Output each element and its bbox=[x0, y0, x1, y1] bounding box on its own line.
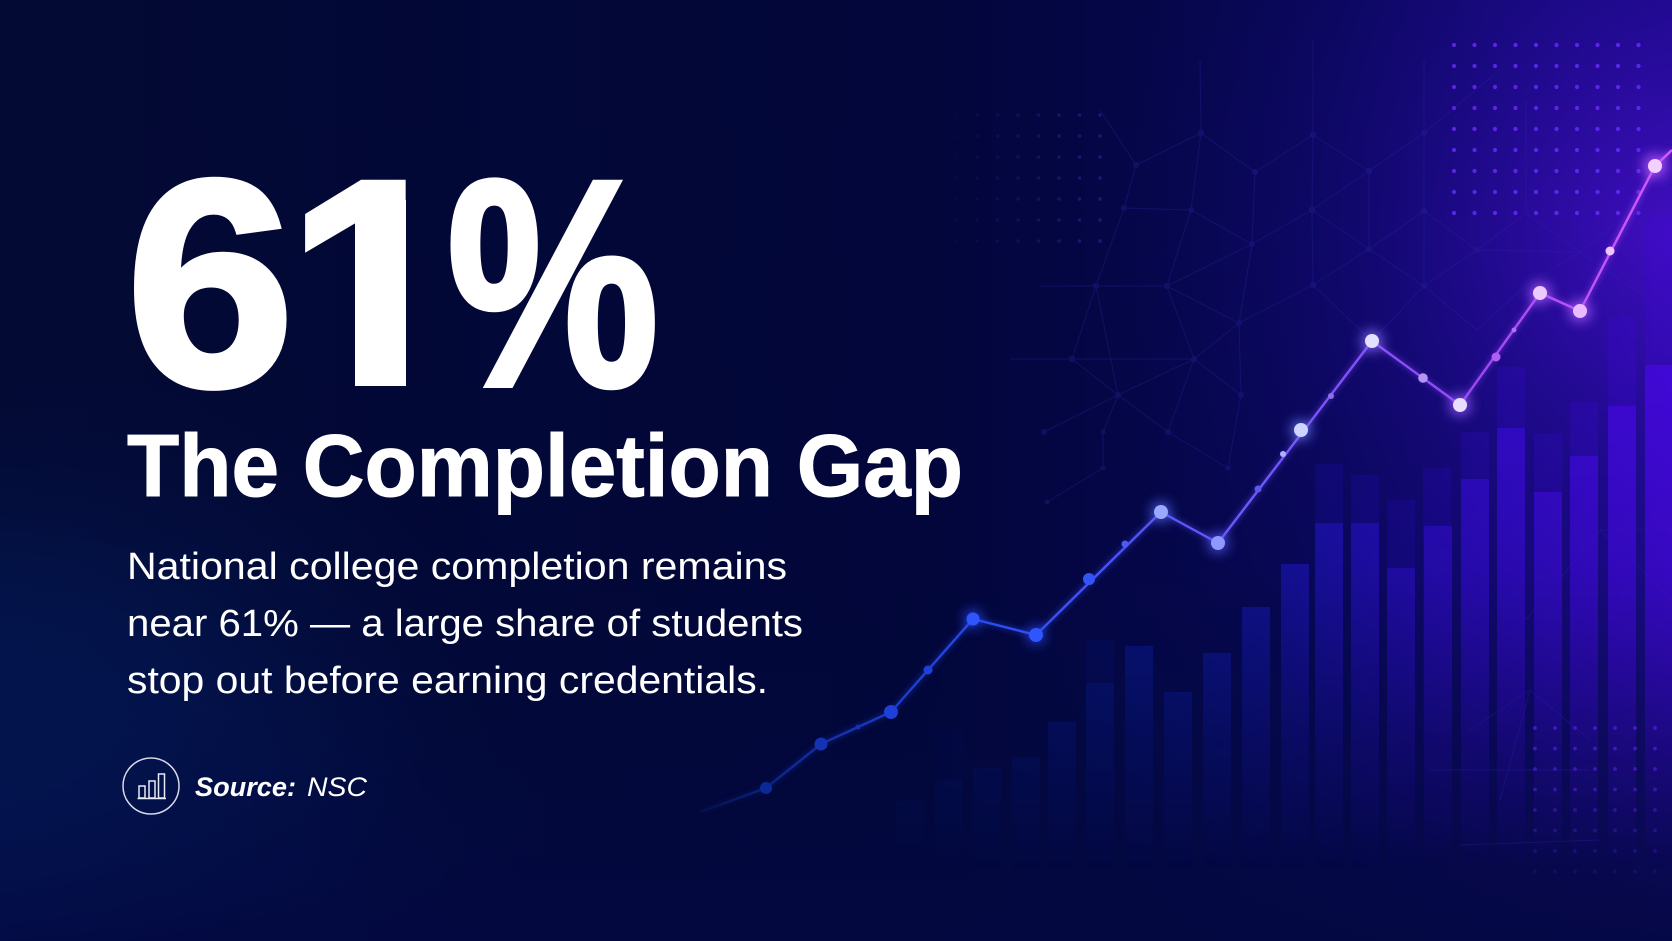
line chart bbox=[700, 150, 1672, 812]
dot grid: upper middle bbox=[957, 113, 1102, 243]
source row bbox=[123, 758, 368, 814]
dot grid: lower right bbox=[1533, 726, 1657, 874]
icon: bar chart in circle bbox=[123, 758, 179, 814]
big stat: 61%: % bbox=[447, 119, 659, 448]
line glow bbox=[700, 150, 1672, 812]
description: stop out before earning credentials. bbox=[127, 660, 768, 702]
source text bbox=[195, 772, 368, 802]
trend line bbox=[700, 150, 1672, 812]
network mesh bbox=[1010, 40, 1672, 845]
back bars bbox=[1086, 248, 1672, 748]
title: The Completion Gap bbox=[127, 416, 963, 515]
node glows bbox=[964, 154, 1667, 644]
dot grid: upper right bbox=[1444, 35, 1649, 225]
source text: Source: bbox=[195, 772, 296, 802]
big stat: 61%: 1 bbox=[287, 120, 460, 448]
description: near 61% — a large share of students bbox=[127, 603, 803, 645]
data points bbox=[760, 159, 1662, 794]
source text: NSC bbox=[307, 772, 368, 802]
description bbox=[127, 546, 803, 702]
description: National college completion remains bbox=[127, 546, 787, 588]
front bars bbox=[973, 365, 1672, 834]
big stat: 61%: 6 bbox=[126, 120, 294, 448]
big stat: 61% bbox=[134, 176, 655, 391]
bar chart bbox=[935, 248, 1672, 838]
